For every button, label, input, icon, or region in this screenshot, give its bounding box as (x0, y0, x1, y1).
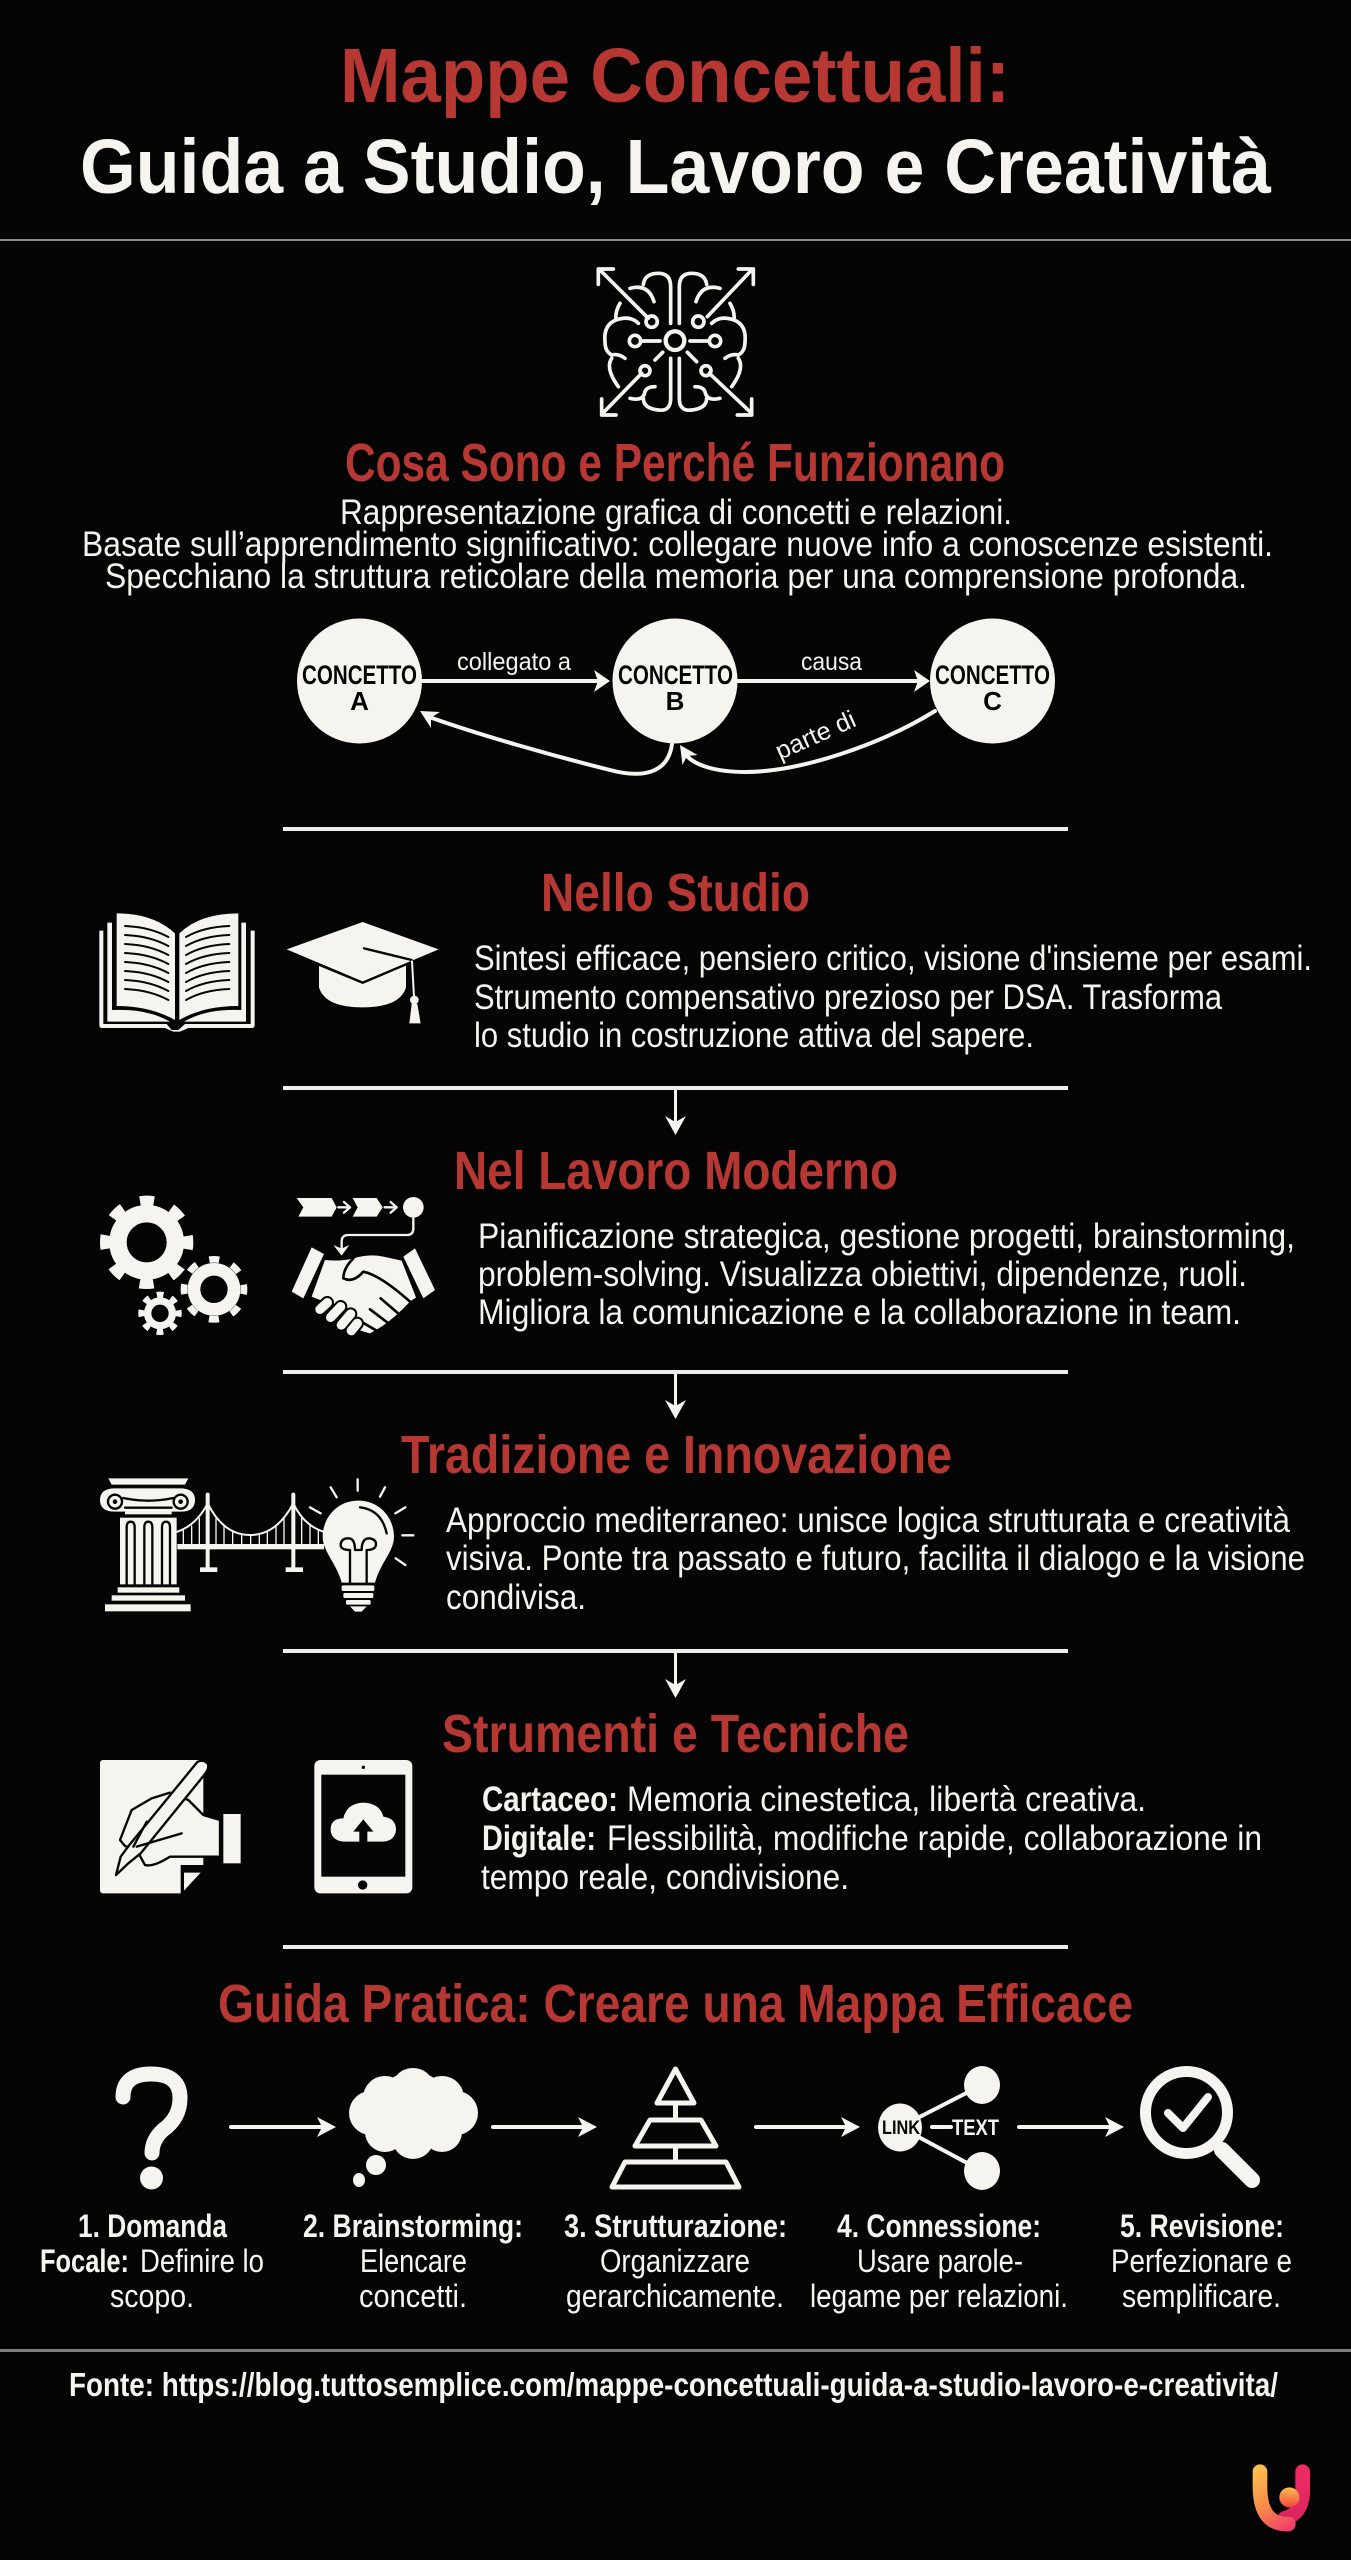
body text: lo studio in costruzione attiva del sapere. (474, 1016, 1034, 1055)
body text: Strumento compensativo prezioso per DSA. Trasforma (474, 978, 1222, 1017)
icon: tablet with cloud upload (314, 1760, 412, 1893)
step 4 label (810, 2208, 1068, 2314)
icon: question mark (123, 2074, 180, 2190)
panel: nel lavoro moderno (105, 1141, 1295, 1333)
panel: strumenti e tecniche (100, 1704, 1262, 1897)
icon: graduation cap (287, 922, 439, 1023)
heading: Cosa Sono e Perché Funzionano (345, 433, 1005, 493)
step 2 label: 2. Brainstorming: (303, 2208, 523, 2244)
step 3 label: Organizzare (600, 2243, 750, 2279)
arrow: collegato a: collegato a (457, 648, 571, 676)
step 1 label: Focale: (40, 2243, 129, 2279)
title line 1: Mappe Concettuali: (340, 33, 1010, 119)
step 1 label: Definire lo (140, 2243, 264, 2279)
step 1 label: scopo. (110, 2278, 194, 2314)
arrow: down to lavoro (665, 1090, 686, 1135)
heading: Tradizione e Innovazione (401, 1425, 952, 1485)
step 4 label: Usare parole- (857, 2243, 1023, 2279)
body text (474, 939, 1312, 1055)
node: concetto A (297, 618, 422, 744)
title line 2: Guida a Studio, Lavoro e Creatività (80, 124, 1272, 210)
step 5 label: semplificare. (1122, 2278, 1281, 2314)
icon: open book (99, 913, 255, 1032)
icon: handshake with flow (292, 1197, 435, 1333)
heading: Strumenti e Tecniche (442, 1704, 909, 1764)
body text: Pianificazione strategica, gestione progetti, brainstorming, (478, 1217, 1295, 1256)
icon: link text connection: LINK (882, 2118, 920, 2139)
body text: problem-solving. Visualizza obiettivi, dipendenze, ruoli. (478, 1255, 1247, 1294)
icon: thought cloud (349, 2068, 478, 2187)
body text: Cartaceo: (482, 1780, 618, 1819)
arrow: causa (738, 648, 930, 692)
body text: condivisa. (446, 1578, 586, 1617)
arrow: step 3 to 4 (756, 2117, 860, 2137)
header panel (80, 33, 1272, 210)
step 3 label (564, 2208, 787, 2314)
step 1 label: 1. Domanda (78, 2208, 227, 2244)
body text (478, 1217, 1295, 1332)
step 4 label: legame per relazioni. (810, 2278, 1068, 2314)
arrow: collegato a (422, 648, 610, 692)
body text (446, 1501, 1305, 1617)
panel: tradizione e innovazione (100, 1425, 1305, 1617)
concept map diagram (297, 618, 1055, 774)
panel: cosa sono e perché funzionano (82, 269, 1273, 774)
step 2 label: Elencare (360, 2243, 467, 2279)
node: concetto C (930, 618, 1055, 744)
step 5 label: Perfezionare e (1111, 2243, 1292, 2279)
node: concetto C: C (983, 686, 1002, 716)
icon: link text connection (878, 2066, 1000, 2190)
description text (82, 493, 1273, 596)
icon: hand writing on paper (100, 1760, 241, 1893)
arrow: B to A (420, 711, 672, 774)
step 5 label: 5. Revisione: (1120, 2208, 1284, 2244)
panel: nello studio (99, 863, 1312, 1055)
icon: magnifier check (1146, 2072, 1252, 2180)
arrow: step 4 to 5 (1019, 2117, 1124, 2137)
icon: pyramid hierarchy (612, 2069, 739, 2187)
arrow: C to B, parte di: parte di (771, 705, 860, 765)
step 1 label (40, 2208, 264, 2314)
body text: Digitale: (482, 1819, 596, 1858)
icon: column, bridge and bulb (100, 1478, 413, 1612)
step 3 label: gerarchicamente. (566, 2278, 784, 2314)
body text (481, 1780, 1262, 1897)
step 3 label: 3. Strutturazione: (564, 2208, 787, 2244)
description text: Rappresentazione grafica di concetti e relazioni. (340, 493, 1012, 532)
arrow: down to strumenti (665, 1653, 686, 1698)
node: concetto A: A (350, 686, 369, 716)
icon: gears (105, 1201, 244, 1332)
body text: Memoria cinestetica, libertà creativa. (627, 1780, 1146, 1819)
logo (1260, 2472, 1303, 2524)
node: concetto B (612, 618, 738, 744)
body text: Migliora la comunicazione e la collaborazione in team. (478, 1293, 1241, 1332)
step 5 label (1111, 2208, 1292, 2314)
step 2 label: concetti. (359, 2278, 467, 2314)
body text: Flessibilità, modifiche rapide, collaborazione in (607, 1819, 1262, 1858)
heading: Nel Lavoro Moderno (454, 1141, 898, 1201)
node: concetto C: CONCETTO (935, 660, 1050, 690)
arrow: C to B, parte di (680, 705, 935, 772)
arrow: step 1 to 2 (231, 2117, 336, 2137)
panel: guida pratica (40, 1974, 1292, 2314)
node: concetto A: CONCETTO (302, 660, 417, 690)
icon: link text connection: TEXT (952, 2115, 999, 2140)
arrow: causa: causa (801, 648, 862, 676)
step 2 label (303, 2208, 523, 2314)
arrow: step 2 to 3 (493, 2117, 597, 2137)
heading: Nello Studio (541, 863, 810, 923)
step 4 label: 4. Connessione: (837, 2208, 1041, 2244)
arrow: down to tradizione (665, 1374, 686, 1419)
icon: brain with arrows (598, 269, 753, 415)
description text: Specchiano la struttura reticolare della memoria per una comprensione profonda. (105, 557, 1247, 596)
node: concetto B: CONCETTO (618, 660, 733, 690)
body text: tempo reale, condivisione. (481, 1858, 849, 1897)
node: concetto B: B (666, 686, 684, 716)
heading: Guida Pratica: Creare una Mappa Efficace (218, 1974, 1133, 2034)
